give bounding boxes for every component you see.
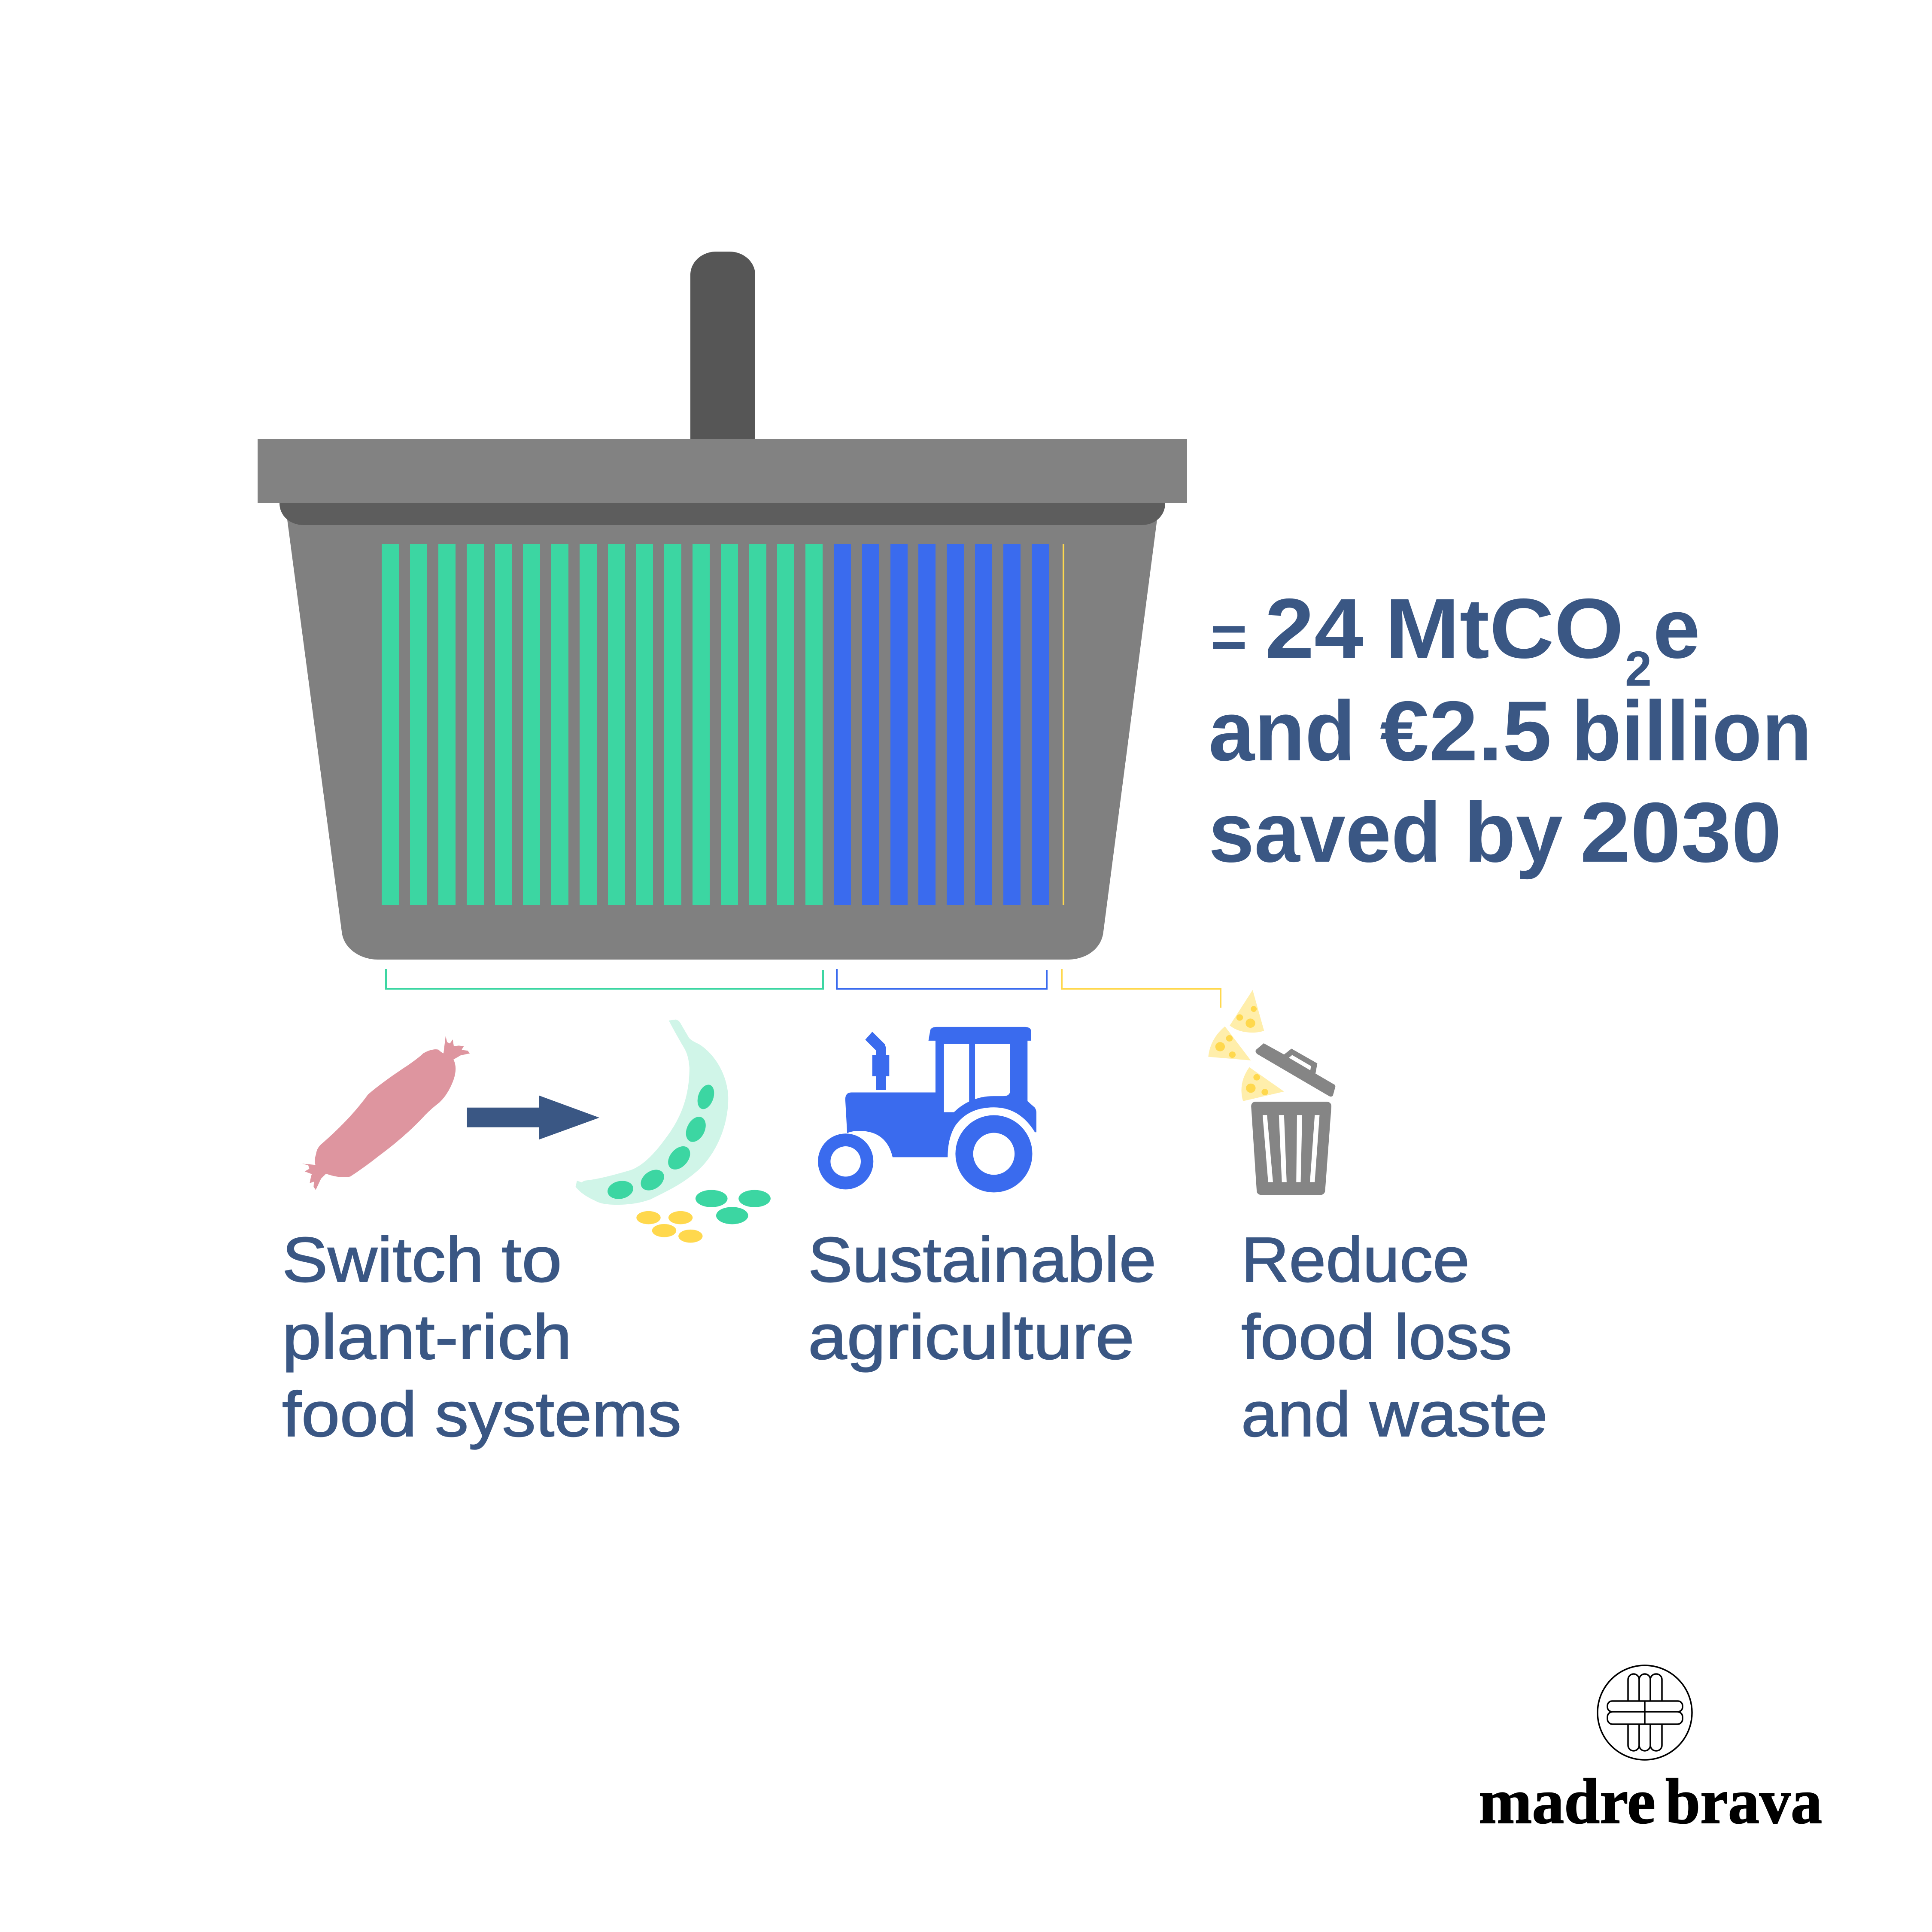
- bracket: agriculture: [837, 969, 1047, 989]
- tractor body and cab: [845, 1027, 1036, 1157]
- cheese slice middle: [1208, 1027, 1251, 1060]
- headline: MtCO: [1385, 581, 1624, 676]
- headline: saved: [1209, 785, 1441, 880]
- label: switch to plant-rich food systems: plant-rich: [282, 1302, 572, 1373]
- arrow: [467, 1096, 599, 1139]
- headline: =: [1210, 603, 1247, 670]
- green beans: [696, 1190, 771, 1224]
- basket body: [286, 513, 1158, 960]
- basket rim: [258, 439, 1187, 503]
- label: reduce food loss and waste: Reduce: [1241, 1224, 1470, 1295]
- headline: billion: [1571, 683, 1812, 778]
- headline: e: [1653, 581, 1700, 676]
- shopping basket: [258, 252, 1187, 960]
- logo emblem: [1598, 1665, 1692, 1760]
- cheese slice bottom: [1242, 1067, 1284, 1101]
- peas in pod: [604, 1084, 717, 1201]
- logo wordmark: [1479, 1766, 1822, 1837]
- exhaust: [865, 1032, 889, 1090]
- logo wordmark: brava: [1665, 1766, 1822, 1837]
- label: reduce food loss and waste: waste: [1369, 1379, 1548, 1450]
- headline: €2.5: [1380, 683, 1552, 778]
- bin body: [1251, 1102, 1331, 1195]
- basket rim shadow: [279, 503, 1165, 525]
- yellow bar: food loss and waste: [1063, 544, 1064, 905]
- label: switch to plant-rich food systems: to: [501, 1224, 562, 1295]
- icon: sausage: [302, 1036, 470, 1190]
- front wheel: [818, 1133, 873, 1189]
- label: reduce food loss and waste: and: [1241, 1379, 1351, 1450]
- rear wheel: [955, 1115, 1032, 1192]
- blue bars: sustainable agriculture: [834, 544, 1049, 905]
- bin lid: [1255, 1043, 1335, 1097]
- label: reduce food loss and waste: [1241, 1224, 1548, 1450]
- headline: and: [1209, 683, 1355, 778]
- pod: [576, 1020, 728, 1205]
- label: sustainable agriculture: Sustainable: [808, 1224, 1156, 1295]
- label: switch to plant-rich food systems: Switch: [282, 1224, 484, 1295]
- basket handle: [690, 252, 755, 442]
- label: reduce food loss and waste: loss: [1394, 1302, 1512, 1373]
- label: switch to plant-rich food systems: systems: [435, 1379, 681, 1450]
- icon: tractor: [818, 1027, 1036, 1192]
- logo: madre brava: [1479, 1665, 1822, 1837]
- label: reduce food loss and waste: food: [1241, 1302, 1375, 1373]
- label: switch to plant-rich food systems: food: [282, 1379, 417, 1450]
- label: sustainable agriculture: [808, 1224, 1156, 1373]
- cheese slice top: [1230, 990, 1264, 1033]
- label: switch to plant-rich food systems: [282, 1224, 681, 1450]
- bracket: plant-rich: [386, 969, 823, 989]
- label: sustainable agriculture: agriculture: [808, 1302, 1134, 1373]
- headline: 2: [1625, 641, 1652, 696]
- headline: by: [1464, 785, 1563, 880]
- logo wordmark: madre: [1479, 1766, 1656, 1837]
- headline: 24: [1265, 581, 1364, 676]
- headline: 2030: [1580, 785, 1782, 880]
- yellow beans: [636, 1211, 703, 1242]
- icon: cheese slices and bin: [1208, 990, 1335, 1195]
- icon: bean pod with beans: [576, 1020, 771, 1242]
- bracket: waste: [1062, 969, 1221, 1008]
- headline: [1209, 581, 1812, 880]
- green bars: plant-rich food systems: [382, 544, 823, 905]
